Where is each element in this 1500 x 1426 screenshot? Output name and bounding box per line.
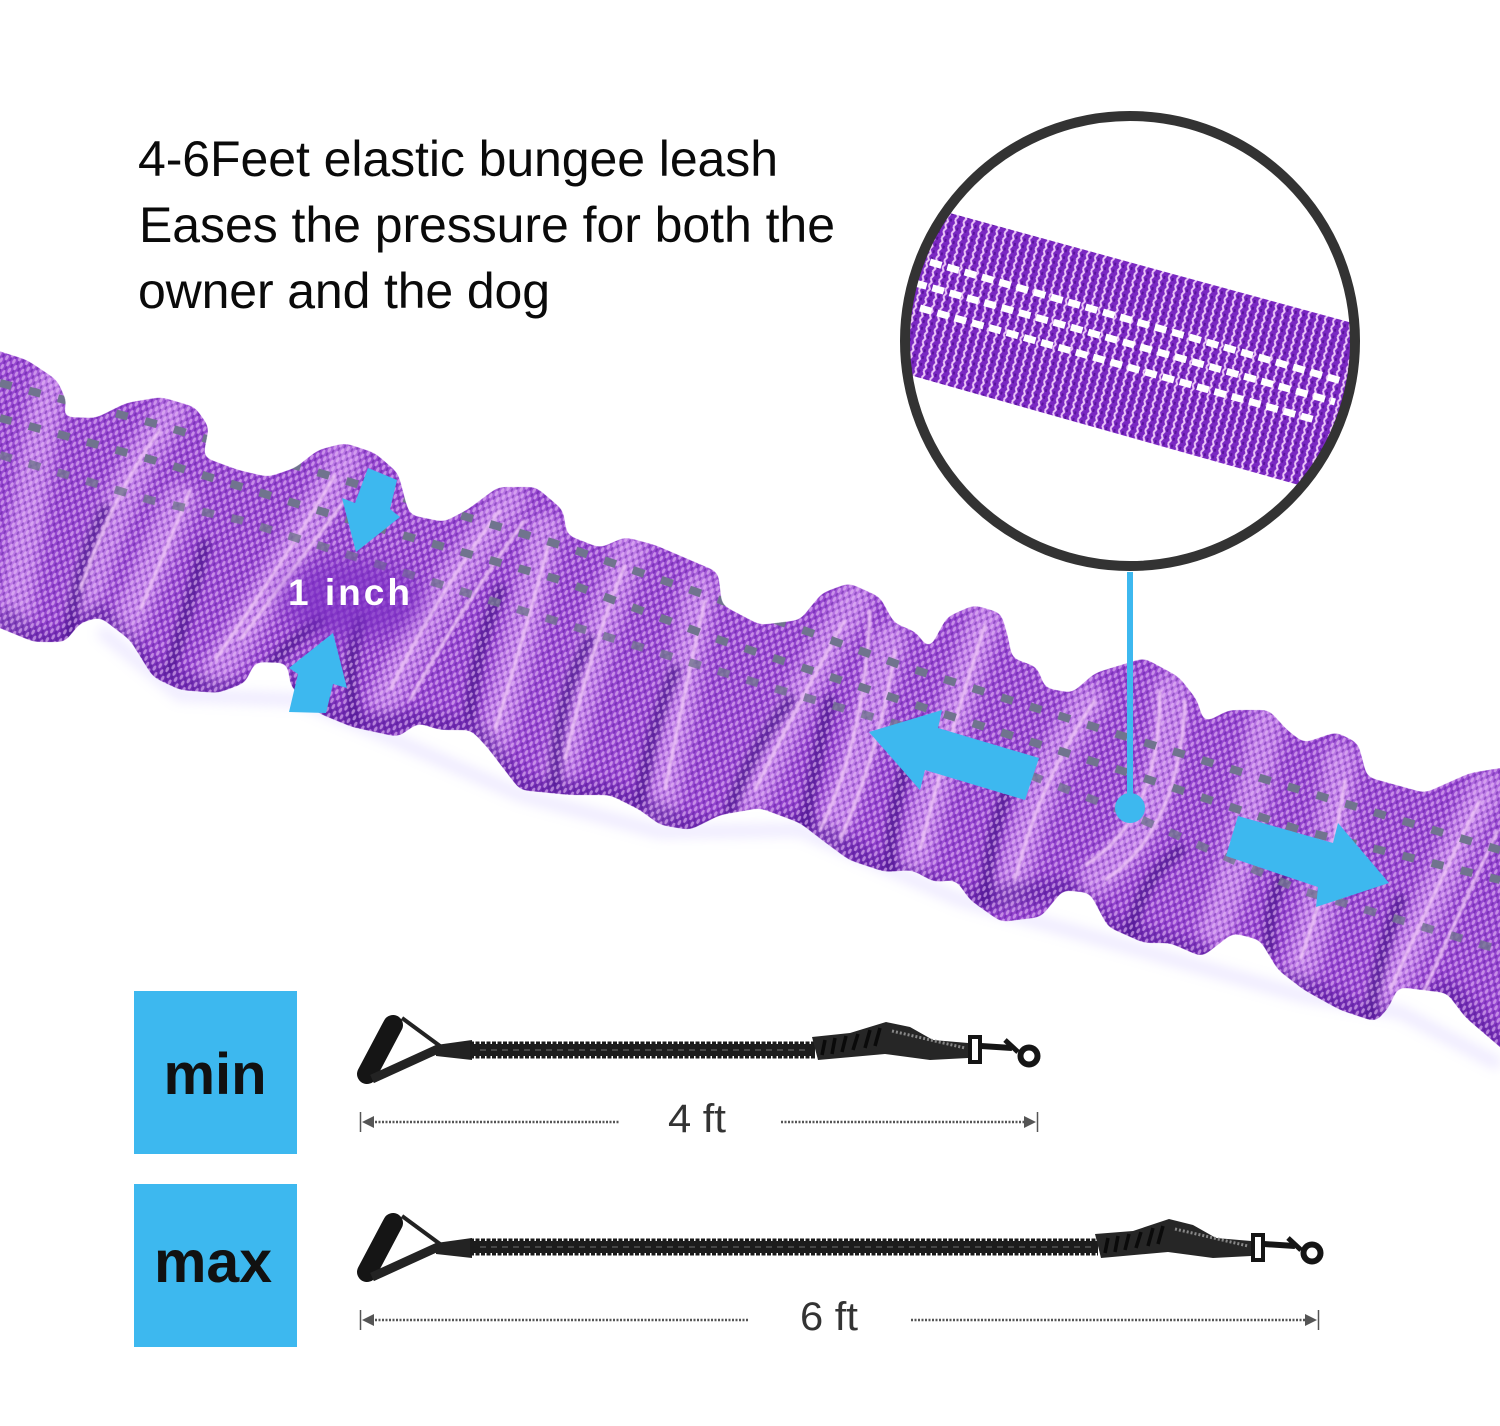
arrow: stretch left (869, 710, 1039, 800)
shadow creases (70, 510, 1400, 1015)
6 ft dimension (360, 1295, 1318, 1339)
lit folds (15, 385, 1485, 1000)
elastic section (470, 1238, 1098, 1256)
arrow: down (342, 468, 400, 552)
lower edge shading (0, 615, 1500, 1047)
label: 1 inch: 1 inch (288, 572, 410, 613)
leash at maximum length (367, 1216, 1320, 1277)
heading text: owner and the dog (138, 263, 550, 319)
arrow: up (289, 633, 347, 713)
heading text (138, 131, 835, 319)
handle (367, 1216, 472, 1277)
max box: max (154, 1229, 272, 1295)
4 ft dimension: 4 ft (668, 1097, 726, 1141)
min box (134, 991, 297, 1154)
6 ft dimension: 6 ft (800, 1295, 858, 1339)
elastic section (470, 1042, 815, 1058)
glow behind label (282, 562, 422, 638)
padded grip (812, 1022, 968, 1060)
clip hook (970, 1037, 1038, 1064)
width measure: 1 inch (282, 468, 422, 713)
4 ft dimension (360, 1097, 1038, 1141)
min box: min (163, 1042, 267, 1107)
white stitch rows (915, 262, 1345, 420)
knit texture (0, 340, 1500, 1070)
heading text: Eases the pressure for both the (139, 197, 835, 253)
heading text: 4-6Feet elastic bungee leash (138, 131, 778, 187)
arrow: stretch right (1226, 816, 1389, 907)
reflective stitching (0, 383, 1500, 950)
callout line and dot (1115, 572, 1145, 823)
handle (367, 1018, 472, 1079)
purple bungee leash photo (0, 340, 1500, 1070)
bright ridge lines (80, 430, 1498, 1000)
max box (134, 1184, 297, 1347)
zoom circle: strap detail (900, 111, 1360, 571)
leash at minimum length (367, 1018, 1038, 1079)
leash soft shadow (100, 630, 1500, 1065)
padded grip (1095, 1219, 1251, 1258)
strap (860, 194, 1400, 530)
clip hook (1253, 1235, 1320, 1262)
